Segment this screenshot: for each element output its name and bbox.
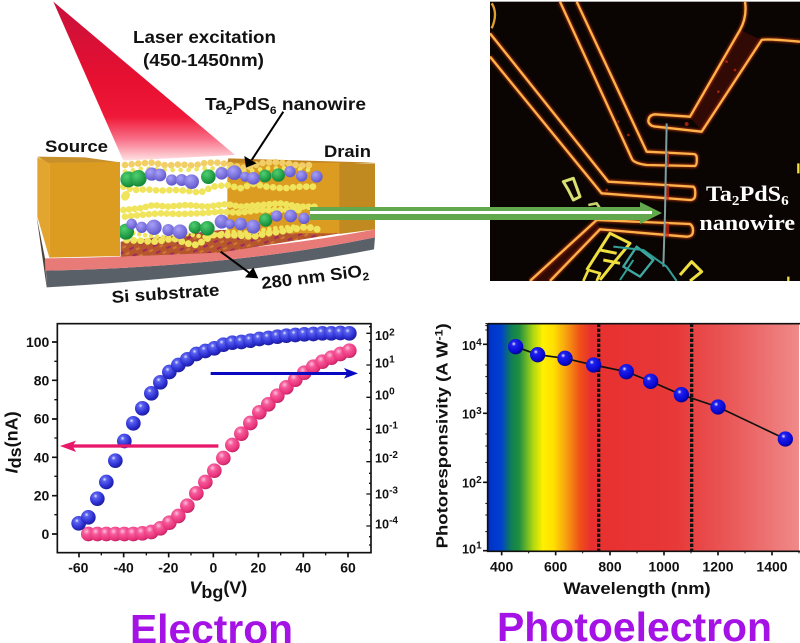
label: Ta2PdS6 nanowire: Ta [706, 181, 730, 206]
frame and ticks [52, 324, 371, 557]
arrow: pink to left axis [60, 441, 218, 452]
panel: photoresponsivity chart [433, 323, 800, 598]
right axis labels: 10 [375, 356, 389, 370]
blue series [71, 326, 357, 531]
SiO2 layer [45, 229, 375, 271]
right axis labels: 0 [389, 387, 395, 398]
data points [508, 339, 793, 447]
arrow: green connector [310, 202, 662, 224]
x axis labels: 800 [598, 559, 622, 575]
right axis labels: 1 [389, 355, 395, 366]
label: Ta2PdS6 nanowire [699, 181, 795, 235]
bottom axis labels: 60 [340, 559, 356, 575]
x axis labels: 1400 [756, 559, 788, 575]
left axis labels: 20 [34, 488, 50, 504]
label: Ta2PdS6 nanowire: nanowire [277, 94, 366, 114]
y axis title: (nA) [2, 411, 22, 447]
label: Ta2PdS6 nanowire: 2 [226, 105, 233, 117]
label: Ta2PdS6 nanowire: 6 [781, 194, 789, 209]
arrow: to SiO2 [221, 252, 258, 278]
arrow: blue to right axis [211, 368, 358, 379]
y axis labels: 1 [476, 541, 482, 552]
y axis labels: 4 [476, 337, 482, 348]
right axis labels: 10 [375, 329, 389, 343]
frame and ticks [483, 324, 800, 555]
nanowire [663, 123, 667, 267]
label: drain: Drain [324, 142, 371, 161]
right axis labels: 10 [375, 452, 389, 466]
label: Ta2PdS6 nanowire: PdS [233, 94, 270, 114]
y axis title: ) [435, 323, 452, 329]
y axis labels: 2 [476, 475, 482, 486]
label: Ta2PdS6 nanowire: PdS [740, 181, 781, 206]
bottom axis labels: -60 [68, 559, 89, 575]
right axis labels: -1 [389, 421, 398, 432]
y axis labels: 3 [476, 406, 482, 417]
arrow: to nanowire [244, 112, 283, 168]
left axis labels: 80 [34, 372, 50, 388]
bottom axis labels: -40 [114, 559, 134, 575]
right axis labels [375, 327, 398, 531]
Si substrate layer [46, 237, 375, 287]
electrodes [490, 2, 800, 281]
right axis labels: -4 [389, 516, 398, 527]
drain electrode [227, 158, 375, 234]
nanowire atoms [118, 162, 323, 245]
x axis title: Wavelength (nm) [563, 579, 711, 598]
substrate left edge [37, 217, 47, 287]
y axis labels: 10 [462, 542, 476, 556]
left axis labels: 0 [42, 526, 50, 542]
right axis labels: -2 [389, 450, 398, 461]
x axis title: V [189, 577, 203, 597]
label: 280 nm SiO2: 2 [362, 271, 370, 284]
label: source: Source [45, 137, 108, 156]
spectrum background [488, 324, 799, 551]
label: Ta2PdS6 nanowire: 6 [270, 105, 277, 117]
label: Ta2PdS6 nanowire: nanowire [699, 210, 795, 235]
x axis labels: 1000 [648, 559, 680, 575]
electrode glow [490, 2, 800, 281]
left axis labels: 40 [34, 449, 50, 465]
right axis labels: -3 [389, 486, 398, 497]
left axis labels: 60 [34, 411, 50, 427]
dotted region dividers [599, 324, 692, 551]
textured channel surface [121, 228, 340, 257]
y axis labels: 10 [462, 477, 476, 491]
right axis labels: 10 [375, 388, 389, 402]
bottom axis labels [68, 559, 356, 575]
y axis labels: 10 [462, 339, 476, 353]
label: laser excitation: Laser excitation [133, 27, 276, 47]
x axis labels: 1200 [702, 559, 734, 575]
x axis title: (V) [223, 577, 247, 597]
panel: optical micrograph [490, 2, 800, 281]
electrode channel tint [530, 30, 762, 281]
label: wavelength range: (450-1450nm) [143, 50, 264, 70]
label: 280 nm SiO2: 280 nm SiO [260, 263, 354, 293]
label: Ta2PdS6 nanowire: 2 [732, 194, 740, 209]
y axis labels: 10 [462, 408, 476, 422]
right axis labels: 2 [389, 327, 395, 338]
laser beam [53, 2, 235, 161]
x axis labels [490, 559, 788, 575]
left axis labels: 100 [26, 334, 50, 350]
label: Si substrate: Si substrate [111, 281, 220, 307]
bottom axis labels: 0 [209, 559, 217, 575]
x axis labels: 400 [490, 559, 514, 575]
right axis labels: 10 [375, 517, 389, 531]
bottom axis labels: -20 [158, 559, 179, 575]
x axis labels: 600 [544, 559, 568, 575]
y axis title: ds [5, 447, 25, 468]
left axis labels [26, 334, 50, 542]
label: Ta2PdS6 nanowire: Ta [205, 94, 224, 114]
y axis title: I [2, 467, 22, 473]
data line [516, 347, 785, 439]
flakes [563, 163, 798, 281]
right axis labels: 10 [375, 422, 389, 436]
electrode crossing tint [605, 60, 736, 237]
y axis title: -1 [433, 329, 445, 340]
panel: device schematic [37, 2, 375, 287]
bottom axis labels: 20 [251, 559, 266, 575]
source electrode [37, 157, 120, 258]
pink series [81, 343, 357, 541]
panel: transfer curve chart [2, 324, 398, 602]
y axis title: Photoresponsivity (A W [435, 369, 452, 548]
y axis labels [462, 337, 482, 556]
right axis labels: 10 [375, 487, 389, 501]
x axis title: bg [201, 582, 223, 602]
bottom axis labels: 40 [296, 559, 311, 575]
